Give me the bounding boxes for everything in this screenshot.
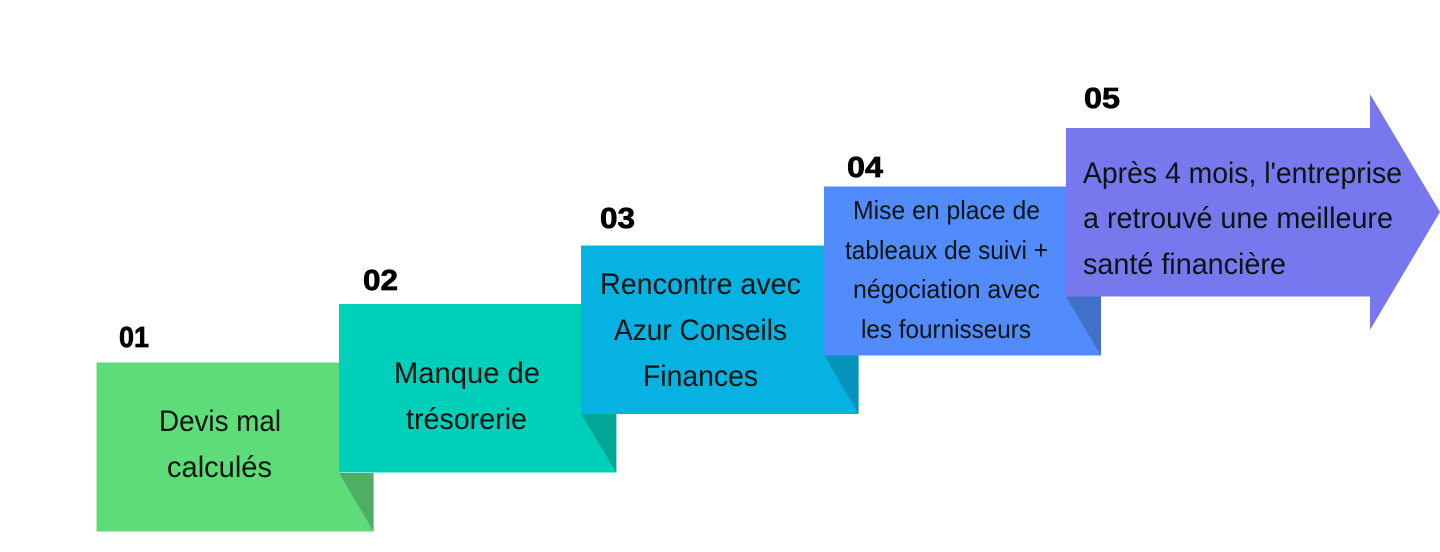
step 01 text: Devis mal [159, 405, 281, 438]
step 05 text: Après 4 mois, l'entreprise [1083, 157, 1402, 190]
step 05 arrow panel [1066, 94, 1440, 330]
step 03 text: Rencontre avec [600, 268, 801, 301]
step 04 panel [824, 186, 1101, 356]
step 04 text: les fournisseurs [861, 314, 1031, 344]
step 01 number: 01 [119, 322, 149, 354]
step 03 text [600, 268, 801, 393]
step 04 text: négociation avec [853, 274, 1040, 304]
step 05 number: 05 [1084, 83, 1120, 115]
step 05 [1066, 83, 1440, 330]
step 04 fold [1065, 296, 1101, 356]
step 02 text [394, 357, 540, 436]
step 04 text: tableaux de suivi + [845, 235, 1048, 265]
step 01 text: calculés [167, 451, 272, 484]
step 02 panel [339, 304, 616, 472]
step 05 text [1083, 157, 1402, 281]
step 02 text: Manque de [394, 357, 540, 390]
step 01 text [159, 405, 281, 484]
step 04 text: Mise en place de [853, 195, 1040, 225]
step 01 [96, 322, 374, 532]
step 01 panel [96, 362, 374, 532]
step 03 number: 03 [600, 203, 635, 235]
step 02 number: 02 [363, 265, 398, 297]
step 05 text: santé financière [1083, 248, 1286, 281]
step 05 text: a retrouvé une meilleure [1083, 202, 1393, 235]
step 02 text: trésorerie [406, 403, 527, 436]
step 01 fold [338, 473, 374, 532]
step 04 [824, 152, 1101, 356]
step 03 text: Finances [643, 360, 758, 393]
step 03 fold [823, 355, 859, 414]
step 03 [581, 203, 859, 414]
step 04 text [845, 195, 1048, 344]
step 02 [339, 265, 616, 472]
step 03 panel [581, 246, 859, 414]
step 02 fold [580, 414, 616, 472]
step 03 text: Azur Conseils [614, 314, 787, 347]
step 04 number: 04 [847, 152, 883, 184]
